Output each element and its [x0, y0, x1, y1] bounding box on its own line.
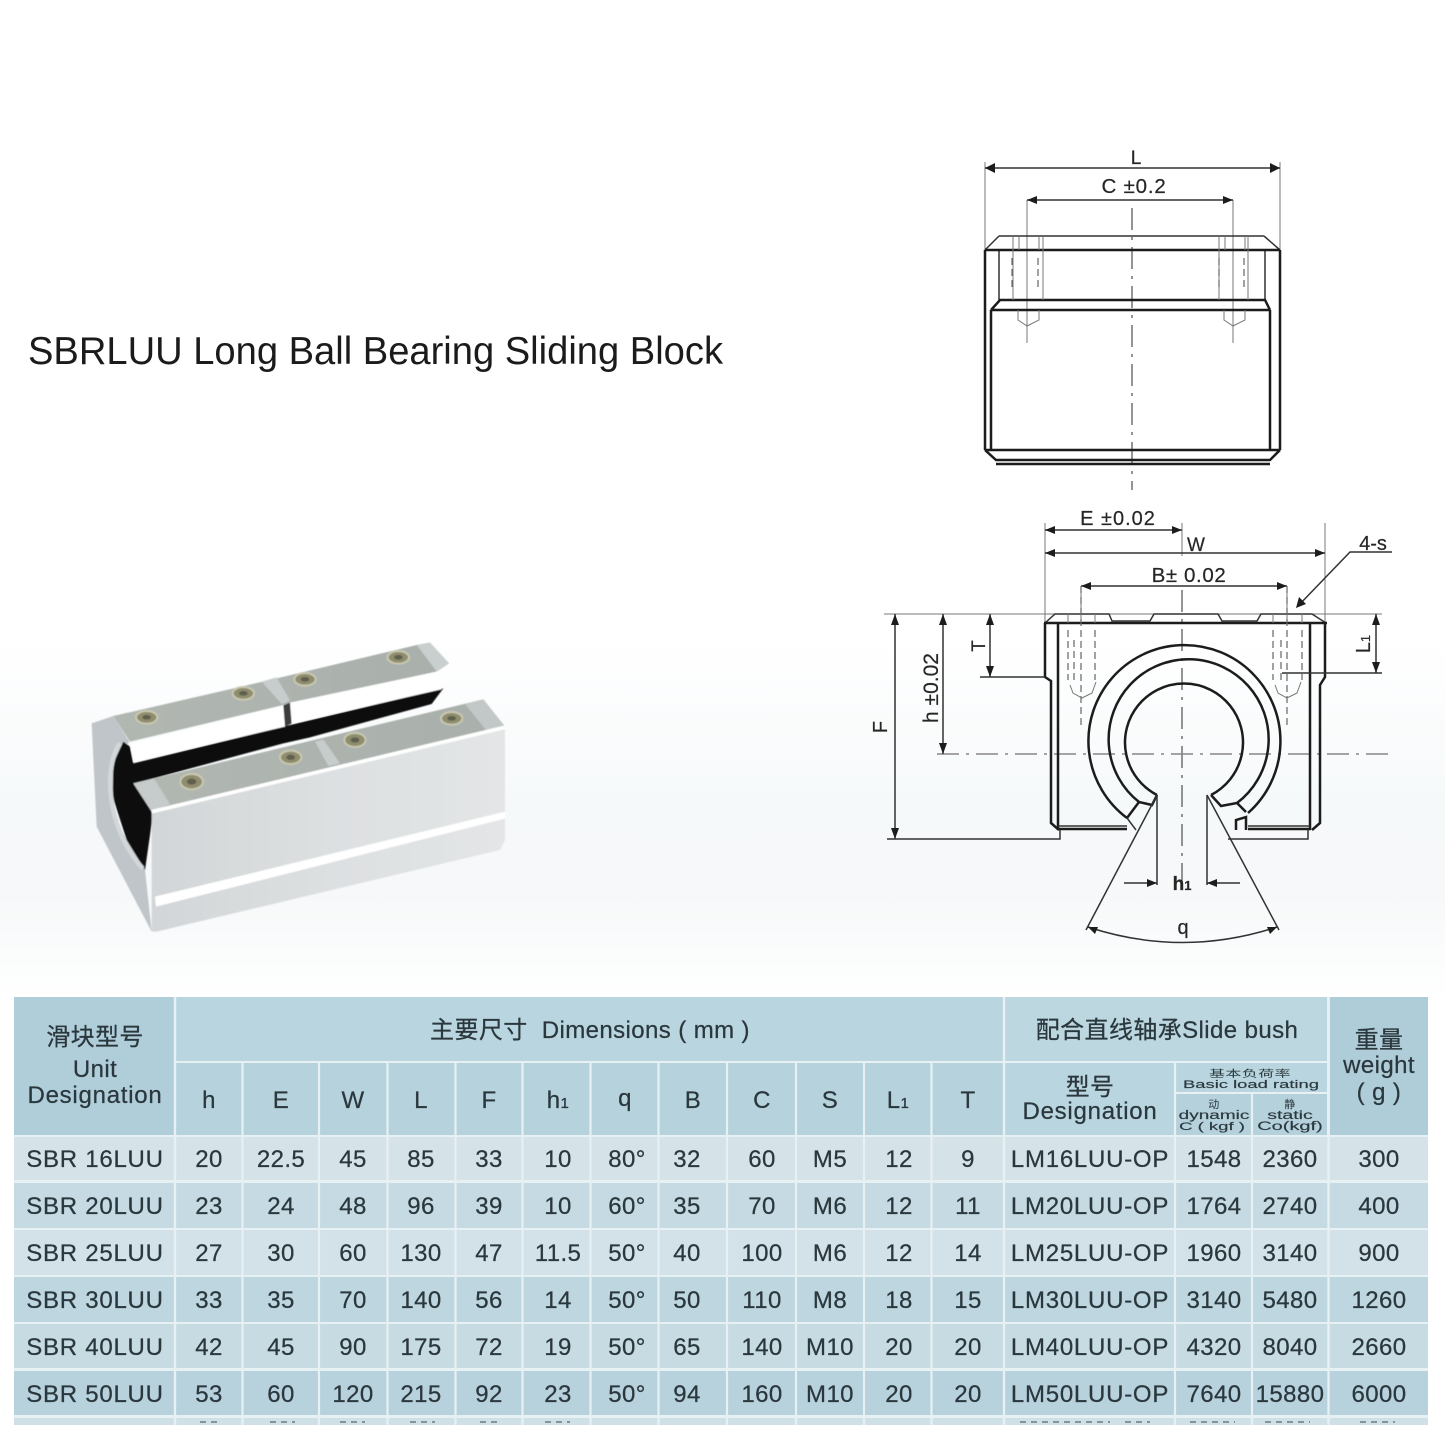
- row: SBR 25LUU: 1960: [1186, 1240, 1242, 1267]
- dimension L: [985, 148, 1280, 250]
- row: SBR 25LUU: LM25LUU-OP: [1011, 1240, 1169, 1267]
- table header: Unit: [73, 1056, 117, 1083]
- dimension B: B± 0.02: [1152, 564, 1226, 587]
- table header: dynamic: [1179, 1109, 1249, 1122]
- dimension h1: [1124, 795, 1240, 895]
- dimension T: T: [969, 640, 990, 652]
- table header: h: [202, 1087, 216, 1114]
- dimension L: L: [1131, 148, 1141, 169]
- title: SBRLUU Long Ball Bearing Sliding Block: [28, 330, 723, 373]
- table header: F: [481, 1087, 497, 1114]
- row: SBR 50LUU: SBR 50LUU: [26, 1381, 164, 1408]
- table header: 静: [1284, 1097, 1296, 1111]
- page background: [0, 640, 1445, 1000]
- table header: C ( kgf ): [1179, 1120, 1245, 1133]
- row: SBR 25LUU: 40: [673, 1240, 701, 1267]
- dimension F: F: [870, 721, 892, 733]
- dimension h1: h1: [1173, 874, 1191, 895]
- row: SBR 40LUU: SBR 40LUU: [26, 1334, 164, 1361]
- row: SBR 16LUU: 45: [339, 1146, 367, 1173]
- dimension E: [1045, 508, 1182, 534]
- row: SBR 50LUU: 53: [195, 1381, 223, 1408]
- row: SBR 40LUU: 20: [954, 1334, 982, 1361]
- row: SBR 16LUU: 10: [544, 1146, 572, 1173]
- table header: 型号: [1066, 1074, 1114, 1101]
- row: SBR 50LUU: 6000: [1352, 1381, 1406, 1408]
- table header: Basic load rating: [1183, 1078, 1319, 1091]
- row: SBR 20LUU: 35: [673, 1193, 701, 1220]
- table header: L1: [887, 1087, 909, 1114]
- row: SBR 40LUU: 2660: [1352, 1334, 1406, 1361]
- top view technical drawing: [985, 148, 1280, 490]
- row: SBR 16LUU: M5: [813, 1146, 847, 1173]
- dimension L1: L1: [1353, 635, 1375, 653]
- table header: 主要尺寸 Dimensions ( mm ): [430, 1017, 750, 1044]
- row: SBR 30LUU: 5480: [1262, 1287, 1318, 1314]
- table header: E: [273, 1087, 289, 1114]
- row: SBR 20LUU: 23: [195, 1193, 223, 1220]
- specification table: [14, 997, 1428, 1425]
- row: SBR 40LUU: 90: [339, 1334, 367, 1361]
- row: SBR 16LUU: 20: [195, 1146, 223, 1173]
- row: SBR 40LUU: 72: [475, 1334, 503, 1361]
- row: SBR 25LUU: [26, 1240, 1400, 1267]
- row: SBR 20LUU: [26, 1193, 1400, 1220]
- top view body outline: [985, 208, 1280, 490]
- row: SBR 40LUU: 20: [885, 1334, 913, 1361]
- table header: T: [960, 1087, 976, 1114]
- table header: 滑块型号: [46, 1024, 144, 1051]
- row: SBR 30LUU: M8: [813, 1287, 847, 1314]
- row: SBR 50LUU: 23: [544, 1381, 572, 1408]
- row: SBR 40LUU: 175: [400, 1334, 442, 1361]
- table header: Co(kgf): [1257, 1119, 1323, 1133]
- row: SBR 30LUU: LM30LUU-OP: [1011, 1287, 1169, 1314]
- row: SBR 25LUU: 50°: [608, 1240, 646, 1267]
- row: SBR 20LUU: 70: [748, 1193, 776, 1220]
- row: SBR 30LUU: 110: [742, 1287, 782, 1314]
- row: SBR 20LUU: SBR 20LUU: [26, 1193, 164, 1220]
- row: SBR 25LUU: 30: [267, 1240, 295, 1267]
- row: SBR 40LUU: LM40LUU-OP: [1011, 1334, 1169, 1361]
- row: SBR 16LUU: 1548: [1186, 1146, 1242, 1173]
- row: SBR 30LUU: 56: [475, 1287, 503, 1314]
- row: SBR 20LUU: 48: [339, 1193, 367, 1220]
- row: SBR 50LUU: 7640: [1186, 1381, 1242, 1408]
- table header: static: [1267, 1109, 1313, 1122]
- row: SBR 25LUU: 12: [885, 1240, 913, 1267]
- row: SBR 30LUU: 3140: [1186, 1287, 1242, 1314]
- bolt holes, top view: [1012, 236, 1248, 326]
- dimension F: [870, 614, 899, 839]
- row: SBR 50LUU: 160: [741, 1381, 783, 1408]
- row: SBR 30LUU: 14: [544, 1287, 572, 1314]
- dimension C: C ±0.2: [1101, 175, 1167, 198]
- dimension q angle: q: [1177, 917, 1189, 939]
- table header: 配合直线轴承Slide bush: [1036, 1017, 1298, 1044]
- row: SBR 25LUU: 130: [400, 1240, 442, 1267]
- row: SBR 40LUU: 19: [544, 1334, 572, 1361]
- row: SBR 40LUU: [26, 1334, 1406, 1361]
- row: SBR 16LUU: 300: [1358, 1146, 1400, 1173]
- row: SBR 50LUU: 60: [267, 1381, 295, 1408]
- table header: Designation: [28, 1082, 162, 1109]
- dimension h: h ±0.02: [920, 653, 943, 723]
- table header: L: [414, 1087, 428, 1114]
- row: SBR 50LUU: 94: [673, 1381, 701, 1408]
- dimension h: [920, 614, 947, 754]
- block outline: [887, 614, 1327, 839]
- row: SBR 16LUU: [26, 1146, 1400, 1173]
- row: SBR 20LUU: 24: [267, 1193, 295, 1220]
- row: SBR 25LUU: 11.5: [535, 1240, 581, 1267]
- row: SBR 40LUU: 42: [195, 1334, 223, 1361]
- row: SBR 20LUU: 400: [1358, 1193, 1400, 1220]
- table header: [28, 1017, 1415, 1133]
- row: SBR 30LUU: 50°: [608, 1287, 646, 1314]
- row: SBR 25LUU: 3140: [1262, 1240, 1318, 1267]
- row: SBR 25LUU: 60: [339, 1240, 367, 1267]
- dimension W: [1045, 535, 1325, 557]
- table header: B: [685, 1087, 701, 1114]
- row: SBR 20LUU: 39: [475, 1193, 503, 1220]
- row: SBR 50LUU: 15880: [1256, 1381, 1324, 1408]
- row: SBR 40LUU: 4320: [1186, 1334, 1242, 1361]
- dimension T: [969, 614, 1045, 677]
- row: SBR 50LUU: LM50LUU-OP: [1011, 1381, 1169, 1408]
- table header: 动: [1208, 1098, 1220, 1111]
- extension and center lines: [884, 523, 1392, 890]
- row: SBR 50LUU: 50°: [608, 1381, 646, 1408]
- row: SBR 20LUU: 1764: [1186, 1193, 1242, 1220]
- row: SBR 50LUU: 120: [332, 1381, 374, 1408]
- table header: Designation: [1022, 1098, 1158, 1125]
- row: SBR 20LUU: 2740: [1262, 1193, 1318, 1220]
- row: SBR 16LUU: 80°: [608, 1146, 646, 1173]
- dimension C: [1027, 175, 1233, 343]
- row: SBR 20LUU: LM20LUU-OP: [1011, 1193, 1169, 1220]
- row: SBR 20LUU: 10: [544, 1193, 572, 1220]
- row: SBR 16LUU: 2360: [1262, 1146, 1318, 1173]
- row: SBR 25LUU: 14: [954, 1240, 982, 1267]
- row: SBR 30LUU: 140: [400, 1287, 442, 1314]
- table header: 重量: [1355, 1027, 1403, 1054]
- row: SBR 40LUU: M10: [806, 1334, 854, 1361]
- table header: weight: [1342, 1052, 1415, 1079]
- row: SBR 20LUU: 12: [885, 1193, 913, 1220]
- row: SBR 50LUU: M10: [806, 1381, 854, 1408]
- row: SBR 25LUU: SBR 25LUU: [26, 1240, 164, 1267]
- dimension q angle: [1086, 795, 1279, 942]
- row: SBR 30LUU: SBR 30LUU: [26, 1287, 164, 1314]
- row: SBR 40LUU: 65: [673, 1334, 701, 1361]
- row: SBR 16LUU: 12: [885, 1146, 913, 1173]
- row: SBR 40LUU: 50°: [608, 1334, 646, 1361]
- row: SBR 50LUU: 92: [475, 1381, 503, 1408]
- row: SBR 50LUU: 215: [400, 1381, 442, 1408]
- row: SBR 40LUU: 8040: [1262, 1334, 1318, 1361]
- front view technical drawing: [870, 508, 1392, 942]
- row: SBR 16LUU: SBR 16LUU: [26, 1146, 164, 1173]
- table header: ( g ): [1357, 1079, 1401, 1106]
- bolt holes, front view: [1068, 586, 1302, 725]
- row: SBR 50LUU: 20: [954, 1381, 982, 1408]
- dimension W: W: [1187, 535, 1205, 556]
- table header: h1: [547, 1087, 569, 1114]
- row: SBR 25LUU: M6: [813, 1240, 847, 1267]
- row: SBR 16LUU: 33: [475, 1146, 503, 1173]
- row: SBR 30LUU: 33: [195, 1287, 223, 1314]
- row: SBR 20LUU: 96: [407, 1193, 435, 1220]
- row: SBR 20LUU: 60°: [608, 1193, 646, 1220]
- row: SBR 16LUU: 32: [673, 1146, 701, 1173]
- row: SBR 20LUU: 11: [955, 1193, 981, 1220]
- row: SBR 16LUU: 60: [748, 1146, 776, 1173]
- row: SBR 50LUU: 20: [885, 1381, 913, 1408]
- row: SBR 16LUU: 22.5: [257, 1146, 305, 1173]
- row: SBR 50LUU: [26, 1381, 1406, 1408]
- callout 4-s: 4-s: [1359, 533, 1387, 555]
- row: SBR 40LUU: 45: [267, 1334, 295, 1361]
- table header: 基本负荷率: [1209, 1068, 1291, 1079]
- row: SBR 30LUU: 15: [954, 1287, 982, 1314]
- row: SBR 25LUU: 27: [195, 1240, 223, 1267]
- row: SBR 30LUU: 50: [673, 1287, 701, 1314]
- table header: q: [618, 1085, 632, 1112]
- product photo: sliding block: [92, 643, 505, 932]
- row: SBR 40LUU: 140: [741, 1334, 783, 1361]
- row: SBR 30LUU: 18: [885, 1287, 913, 1314]
- table header: C: [753, 1087, 771, 1114]
- row: SBR 30LUU: 35: [267, 1287, 295, 1314]
- table background and header cells: [14, 997, 1428, 1425]
- row: SBR 25LUU: 900: [1358, 1240, 1400, 1267]
- row: SBR 25LUU: 47: [475, 1240, 503, 1267]
- dimension E: E ±0.02: [1080, 508, 1156, 530]
- row: SBR 16LUU: LM16LUU-OP: [1011, 1146, 1169, 1173]
- dimension B: [1081, 564, 1287, 620]
- bearing rings: [1088, 645, 1280, 830]
- table header: S: [822, 1087, 838, 1114]
- dimension L1: [1282, 614, 1382, 673]
- row: SBR 16LUU: 9: [961, 1146, 975, 1173]
- row: SBR 16LUU: 85: [407, 1146, 435, 1173]
- table header: W: [341, 1087, 365, 1114]
- row: SBR 30LUU: [26, 1287, 1406, 1314]
- callout 4-s: [1296, 533, 1392, 608]
- row: SBR 30LUU: 70: [339, 1287, 367, 1314]
- row: SBR 30LUU: 1260: [1352, 1287, 1406, 1314]
- row: SBR 20LUU: M6: [813, 1193, 847, 1220]
- row: SBR 25LUU: 100: [741, 1240, 783, 1267]
